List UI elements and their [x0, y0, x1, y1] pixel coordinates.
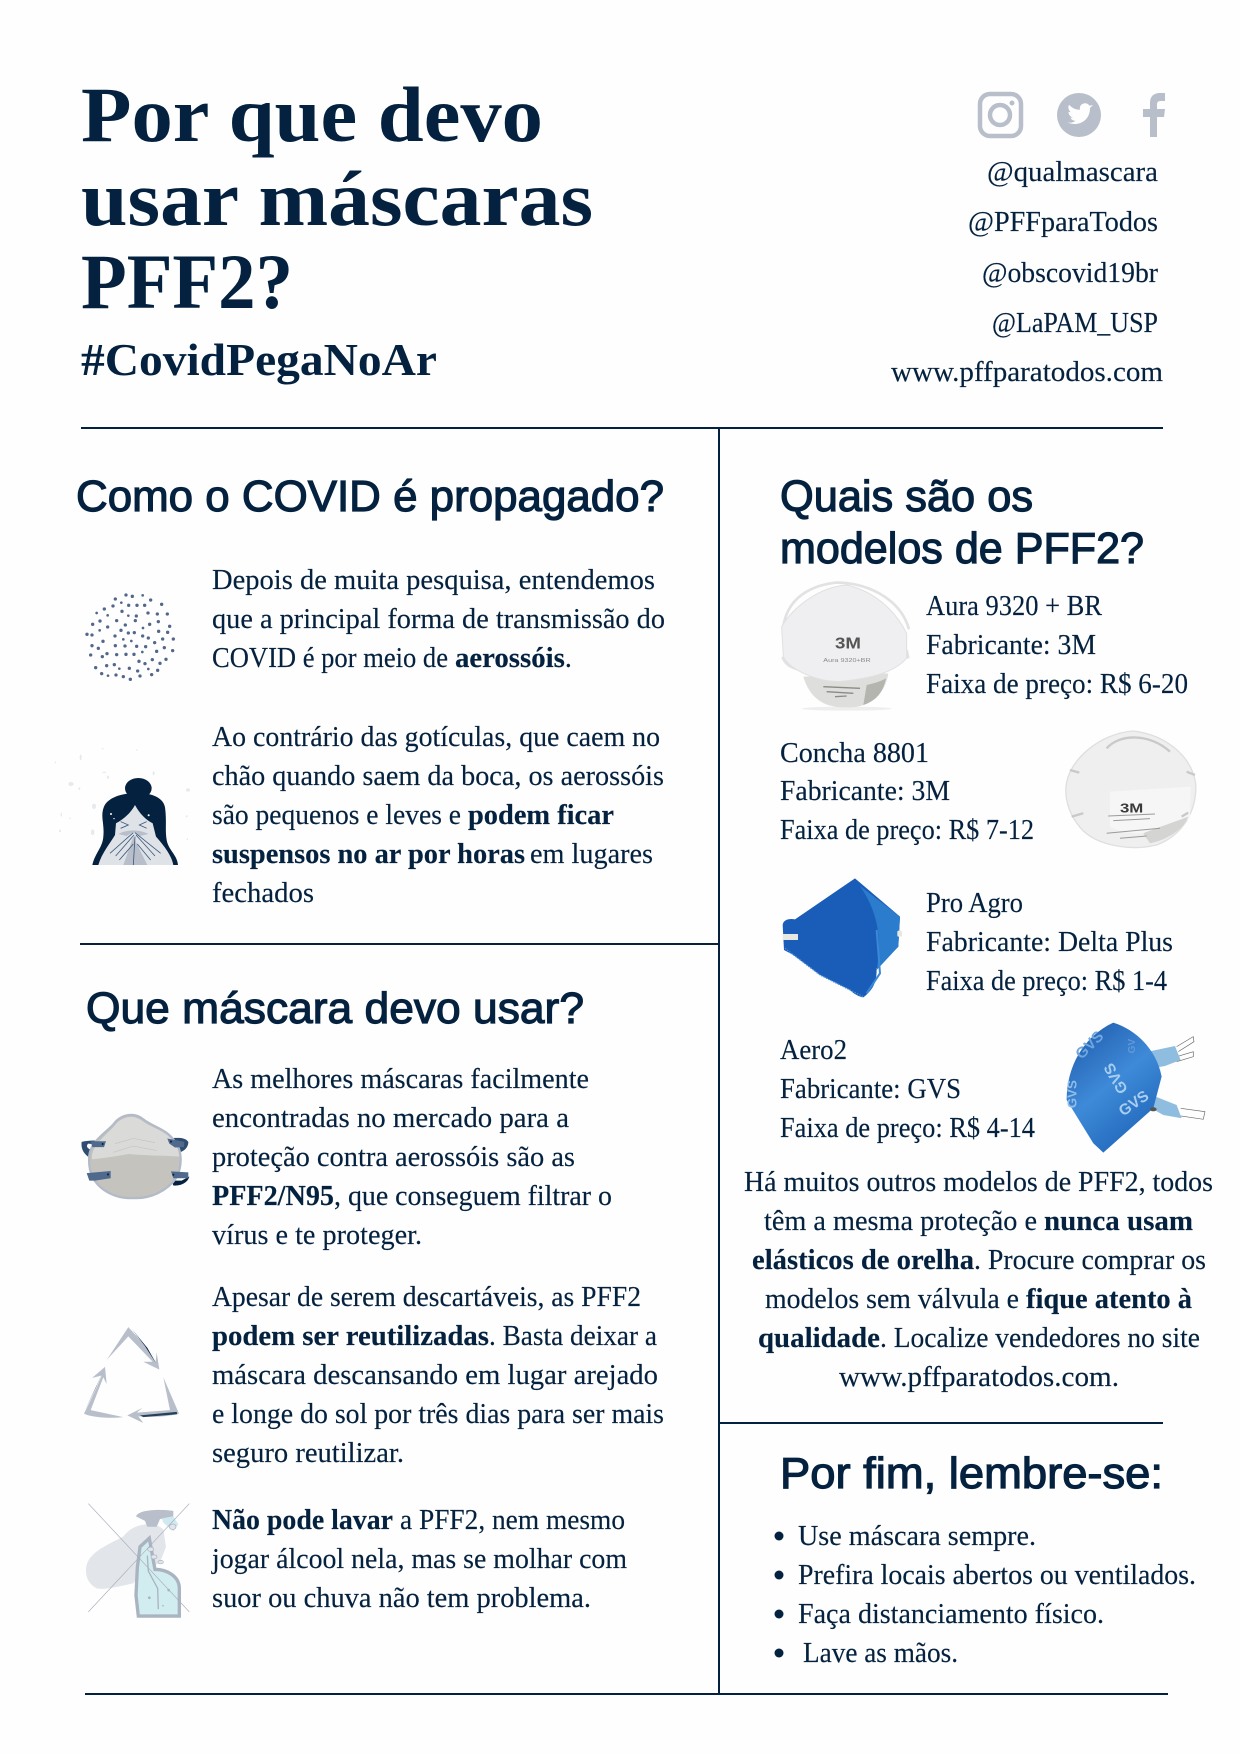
- text: aero2: Faixa de preço: R$ 4-14: [780, 1113, 1035, 1144]
- bullet list: Faça distanciamento físico.: [798, 1599, 1104, 1630]
- text: aero2: Aero2: [780, 1035, 847, 1066]
- text: concha 8801: Fabricante: 3M: [780, 776, 950, 807]
- text: aerossóis: aerossóis.: [455, 643, 572, 674]
- text: outros modelos: . Procure comprar os: [974, 1245, 1206, 1276]
- text: outros modelos: elásticos de orelha: [752, 1245, 974, 1276]
- text: melhores máscaras: , que conseguem filtrar o: [334, 1181, 612, 1212]
- text: aura 9320: [926, 591, 1188, 700]
- photo: aero2: GV: [1127, 1039, 1138, 1053]
- text: outros modelos: fique atento à: [1026, 1284, 1192, 1315]
- photo: aero2: GVS: [1065, 1080, 1080, 1108]
- handles: www.pffparatodos.com: [891, 357, 1163, 388]
- handles: @LaPAM_USP: [992, 308, 1158, 339]
- text: gotículas e aerossóis: chão quando saem da boca, os aerossóis: [212, 761, 664, 792]
- heading: Como o COVID é propagado?: [76, 472, 664, 521]
- title: Por que devo: [81, 71, 543, 158]
- text: melhores máscaras: encontradas no mercado para a: [212, 1103, 570, 1134]
- title: usar máscaras: [81, 155, 593, 242]
- heading: Quais são os: [780, 472, 1033, 521]
- text: pro agro: Fabricante: Delta Plus: [926, 927, 1173, 958]
- text: gotículas e aerossóis: em lugares: [530, 839, 653, 870]
- text: outros modelos: modelos sem válvula e: [765, 1284, 1019, 1315]
- photo: concha 8801: [1066, 731, 1196, 847]
- photo: aura 9320: Aura 9320+BR: [823, 658, 871, 664]
- icon: aerosol particles: [85, 593, 175, 681]
- text: aura 9320: Fabricante: 3M: [926, 630, 1096, 661]
- text: melhores máscaras: PFF2/N95: [212, 1181, 334, 1212]
- panel: modelos de PFF2: [744, 472, 1213, 1393]
- text: reutilização: e longe do sol por três dias para ser mais: [212, 1399, 664, 1430]
- text: reutilização: máscara descansando em lugar arejado: [212, 1360, 658, 1391]
- text: gotículas e aerossóis: são pequenos e leves e: [212, 800, 461, 831]
- bullet list: Prefira locais abertos ou ventilados.: [798, 1560, 1196, 1591]
- panel: por fim, lembre-se: [774, 1449, 1196, 1669]
- text: concha 8801: Concha 8801: [780, 738, 929, 769]
- handles: [891, 157, 1163, 388]
- photo: aero2: [1065, 1023, 1205, 1153]
- text: gotículas e aerossóis: podem ficar: [468, 800, 614, 831]
- icon: instagram: [980, 94, 1021, 136]
- photo: aero2: GVS: [1116, 1087, 1152, 1120]
- heading: [780, 472, 1144, 573]
- photo: aura 9320: [782, 583, 909, 711]
- text: melhores máscaras: vírus e te proteger.: [212, 1220, 422, 1251]
- icon: person sneezing: [55, 748, 190, 865]
- text: outros modelos: [744, 1167, 1213, 1393]
- bullet list: [774, 1521, 1196, 1669]
- text: reutilização: [212, 1282, 664, 1469]
- icon: crossed spray bottle: [86, 1504, 189, 1616]
- text: aerossóis: que a principal forma de transmissão do: [212, 604, 665, 635]
- text: não pode lavar: a PFF2, nem mesmo: [400, 1505, 625, 1536]
- photo: pro agro: [783, 878, 902, 997]
- text: aero2: Fabricante: GVS: [780, 1074, 961, 1105]
- title: [81, 71, 593, 325]
- photo: aero2: GVS: [1101, 1060, 1132, 1096]
- icon: twitter: [1057, 93, 1101, 137]
- text: outros modelos: Há muitos outros modelos de PFF2, todos: [744, 1167, 1213, 1198]
- icon: facebook: [1143, 93, 1165, 137]
- handles: @obscovid19br: [982, 258, 1159, 289]
- photo: aero2: GVS: [1072, 1028, 1107, 1063]
- photo: concha 8801: 3M: [1120, 801, 1143, 816]
- text: outros modelos: têm a mesma proteção e: [764, 1206, 1037, 1237]
- photo: aura 9320: 3M: [835, 636, 861, 653]
- icon: recycle arrows: [84, 1327, 179, 1423]
- text: melhores máscaras: proteção contra aerossóis são as: [212, 1142, 575, 1173]
- text: aerossóis: [212, 565, 665, 674]
- text: pro agro: [926, 888, 1173, 997]
- handles: @qualmascara: [987, 157, 1159, 188]
- text: aura 9320: Faixa de preço: R$ 6-20: [926, 669, 1188, 700]
- panel: como o covid é propagado: [55, 472, 665, 909]
- text: concha 8801: Faixa de preço: R$ 7-12: [780, 815, 1034, 846]
- icon: mask: [81, 1115, 189, 1198]
- panel: que máscara devo usar: [81, 984, 664, 1616]
- text: pro agro: Pro Agro: [926, 888, 1023, 919]
- handles: @PFFparaTodos: [968, 207, 1158, 238]
- heading: Por fim, lembre-se:: [780, 1449, 1163, 1498]
- text: pro agro: Faixa de preço: R$ 1-4: [926, 966, 1167, 997]
- text: não pode lavar: Não pode lavar: [212, 1505, 393, 1536]
- bullet list: Lave as mãos.: [803, 1638, 958, 1669]
- text: concha 8801: [780, 738, 1034, 846]
- text: não pode lavar: jogar álcool nela, mas se molhar com: [211, 1544, 627, 1575]
- text: outros modelos: . Localize vendedores no site: [880, 1323, 1200, 1354]
- text: aerossóis: Depois de muita pesquisa, entendemos: [212, 565, 655, 596]
- heading: Que máscara devo usar?: [86, 984, 584, 1033]
- text: gotículas e aerossóis: fechados: [212, 878, 314, 909]
- text: outros modelos: qualidade: [758, 1323, 880, 1354]
- text: gotículas e aerossóis: suspensos no ar por horas: [212, 839, 525, 870]
- text: outros modelos: www.pffparatodos.com.: [839, 1362, 1119, 1393]
- text: outros modelos: nunca usam: [1044, 1206, 1193, 1237]
- text: melhores máscaras: [212, 1064, 612, 1251]
- hashtag: #CovidPegaNoAr: [81, 334, 437, 385]
- text: aero2: [780, 1035, 1035, 1144]
- text: reutilização: Apesar de serem descartáveis, as PFF2: [212, 1282, 641, 1313]
- text: gotículas e aerossóis: [212, 722, 664, 909]
- text: reutilização: . Basta deixar a: [489, 1321, 658, 1352]
- bullet list: Use máscara sempre.: [798, 1521, 1036, 1552]
- text: melhores máscaras: As melhores máscaras facilmente: [212, 1064, 589, 1095]
- text: gotículas e aerossóis: Ao contrário das gotículas, que caem no: [212, 722, 660, 753]
- title: PFF2?: [81, 238, 293, 325]
- text: não pode lavar: [211, 1505, 627, 1614]
- heading: modelos de PFF2?: [780, 524, 1144, 573]
- social icons and handles: [891, 93, 1165, 388]
- text: reutilização: podem ser reutilizadas: [212, 1321, 489, 1352]
- text: reutilização: seguro reutilizar.: [212, 1438, 404, 1469]
- text: aura 9320: Aura 9320 + BR: [926, 591, 1102, 622]
- text: aerossóis: COVID é por meio de: [212, 643, 448, 674]
- text: não pode lavar: suor ou chuva não tem problema.: [212, 1583, 591, 1614]
